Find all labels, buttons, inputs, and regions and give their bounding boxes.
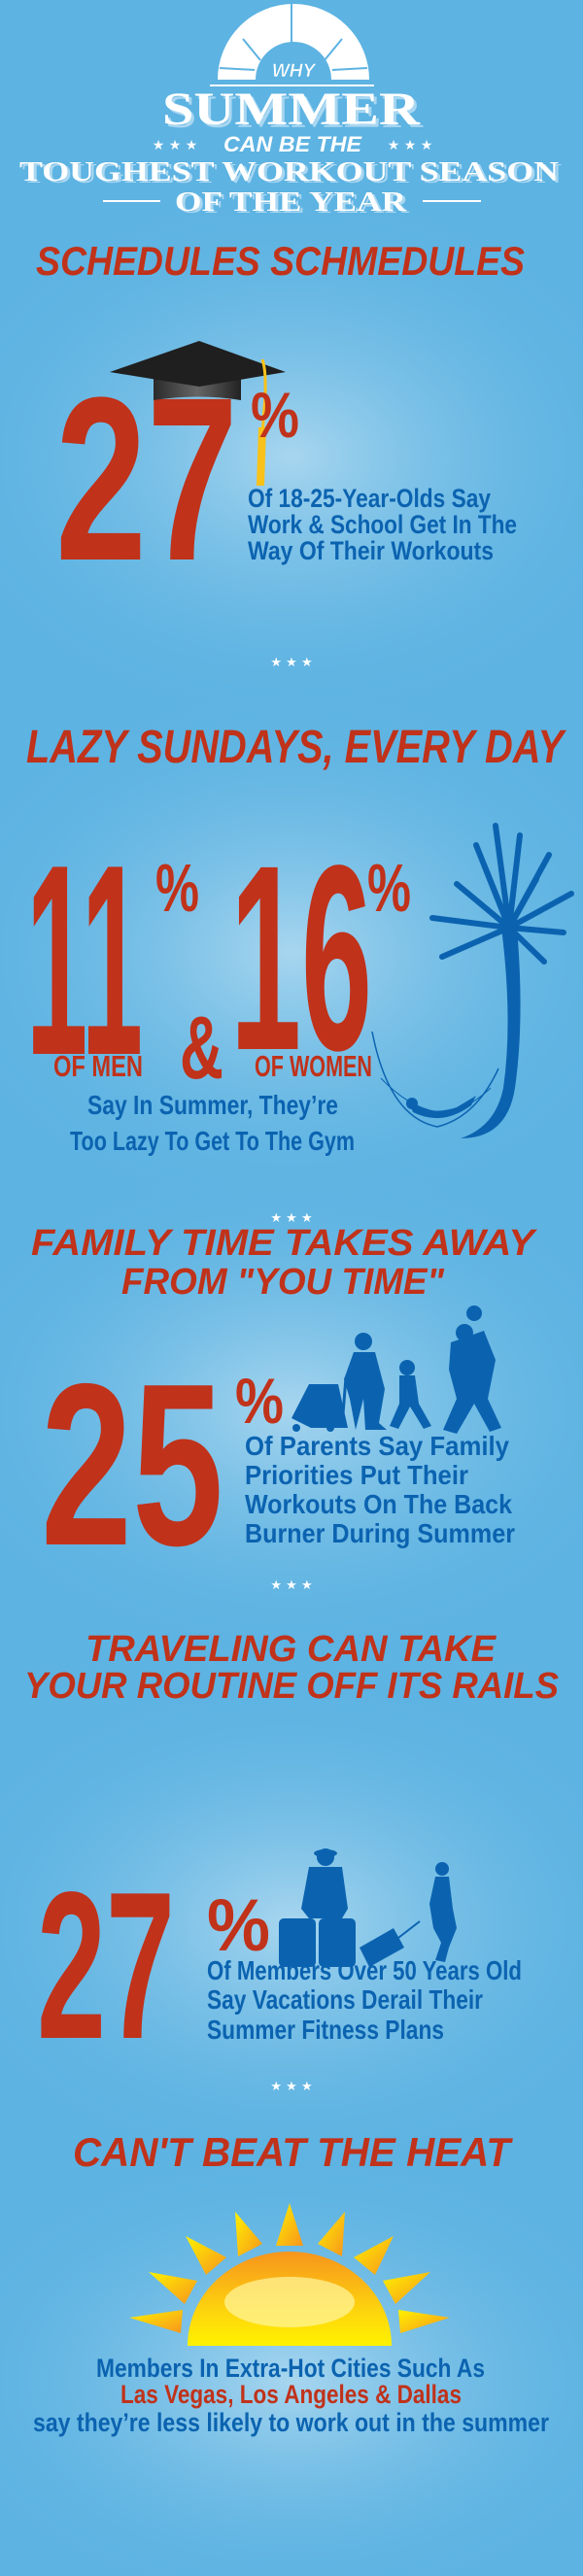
panel: schedules stat	[55, 341, 517, 609]
heading: can't beat the heat: CAN'T BEAT THE HEAT	[73, 2129, 513, 2175]
stat text: Summer Fitness Plans	[207, 2015, 444, 2045]
icon: lifebuoy	[218, 4, 369, 82]
panel: lazy stat: 11	[26, 809, 143, 1112]
heat text	[33, 2354, 549, 2437]
panel: lazy stat: 16	[230, 810, 372, 1105]
stat text: Work & School Get In The	[248, 510, 517, 539]
heading: schedules schmedules: SCHEDULES SCHMEDULES	[36, 238, 525, 284]
icon: travellers with luggage	[279, 1848, 457, 1967]
icon: palm tree with hammock	[372, 826, 571, 1138]
icon: lifebuoy: WHY	[272, 61, 317, 82]
heat text: Las Vegas, Los Angeles & Dallas	[120, 2380, 462, 2409]
stat text: Of Parents Say Family	[245, 1431, 509, 1461]
stat text	[248, 484, 517, 565]
panel: lazy stat: OF WOMEN	[255, 1049, 372, 1083]
stat text: Too Lazy To Get To The Gym	[70, 1126, 355, 1156]
icon: sun	[129, 2203, 450, 2346]
divider stars: ★ ★ ★	[270, 656, 313, 670]
stat text: Of 18-25-Year-Olds Say	[248, 484, 491, 513]
heading: traveling	[24, 1629, 559, 1707]
divider stars: ★ ★ ★	[270, 1211, 313, 1226]
panel: travel stat: 27	[37, 1847, 175, 2083]
stat text: Say In Summer, They’re	[87, 1090, 338, 1120]
stat text: Workouts On The Back	[245, 1489, 512, 1519]
panel: family stat	[41, 1305, 515, 1594]
divider stars: ★ ★ ★	[270, 2080, 313, 2094]
title: ★ ★ ★	[388, 138, 432, 153]
stat text	[245, 1431, 515, 1548]
panel: family stat: %	[235, 1365, 284, 1437]
title	[19, 4, 562, 220]
stat text	[207, 1955, 522, 2045]
panel: lazy stat: %	[155, 850, 199, 926]
heading: family time: FROM "YOU TIME"	[121, 1262, 445, 1303]
panel: travel stat	[37, 1847, 522, 2083]
title: CAN BE THE	[223, 132, 362, 156]
heading: traveling: TRAVELING CAN TAKE	[86, 1629, 497, 1670]
panel: lazy stat: OF MEN	[53, 1049, 143, 1083]
title: OF THE YEAR	[175, 187, 407, 218]
title: SUMMER	[165, 86, 425, 138]
stat text: Say Vacations Derail Their	[207, 1984, 483, 2015]
panel: lazy stat	[26, 809, 571, 1156]
title: OF THE YEAR	[178, 189, 410, 220]
panel: family stat: 25	[41, 1337, 223, 1594]
panel: lazy stat: &	[180, 999, 223, 1098]
heading: family time	[31, 1223, 538, 1303]
title: TOUGHEST WORKOUT SEASON	[19, 157, 559, 187]
heading: family time: FAMILY TIME TAKES AWAY	[31, 1223, 538, 1264]
title: SUMMER	[162, 84, 422, 135]
title: ★ ★ ★	[153, 138, 197, 153]
panel: heat	[33, 2203, 549, 2437]
heading: traveling: YOUR ROUTINE OFF ITS RAILS	[24, 1666, 559, 1707]
title: TOUGHEST WORKOUT SEASON	[22, 159, 562, 189]
stat text	[70, 1090, 355, 1156]
stat text: Burner During Summer	[245, 1518, 515, 1548]
panel: schedules stat: %	[251, 379, 299, 451]
heat text: Members In Extra-Hot Cities Such As	[96, 2354, 485, 2383]
divider stars: ★ ★ ★	[270, 1578, 313, 1593]
icon: graduation cap	[110, 341, 286, 486]
panel: travel stat: %	[207, 1884, 270, 1967]
stat text: Way Of Their Workouts	[248, 536, 494, 565]
stat text: Priorities Put Their	[245, 1460, 468, 1490]
icon: family silhouette	[292, 1305, 501, 1434]
panel: lazy stat: %	[367, 850, 411, 926]
big number 27: 27	[55, 349, 238, 609]
